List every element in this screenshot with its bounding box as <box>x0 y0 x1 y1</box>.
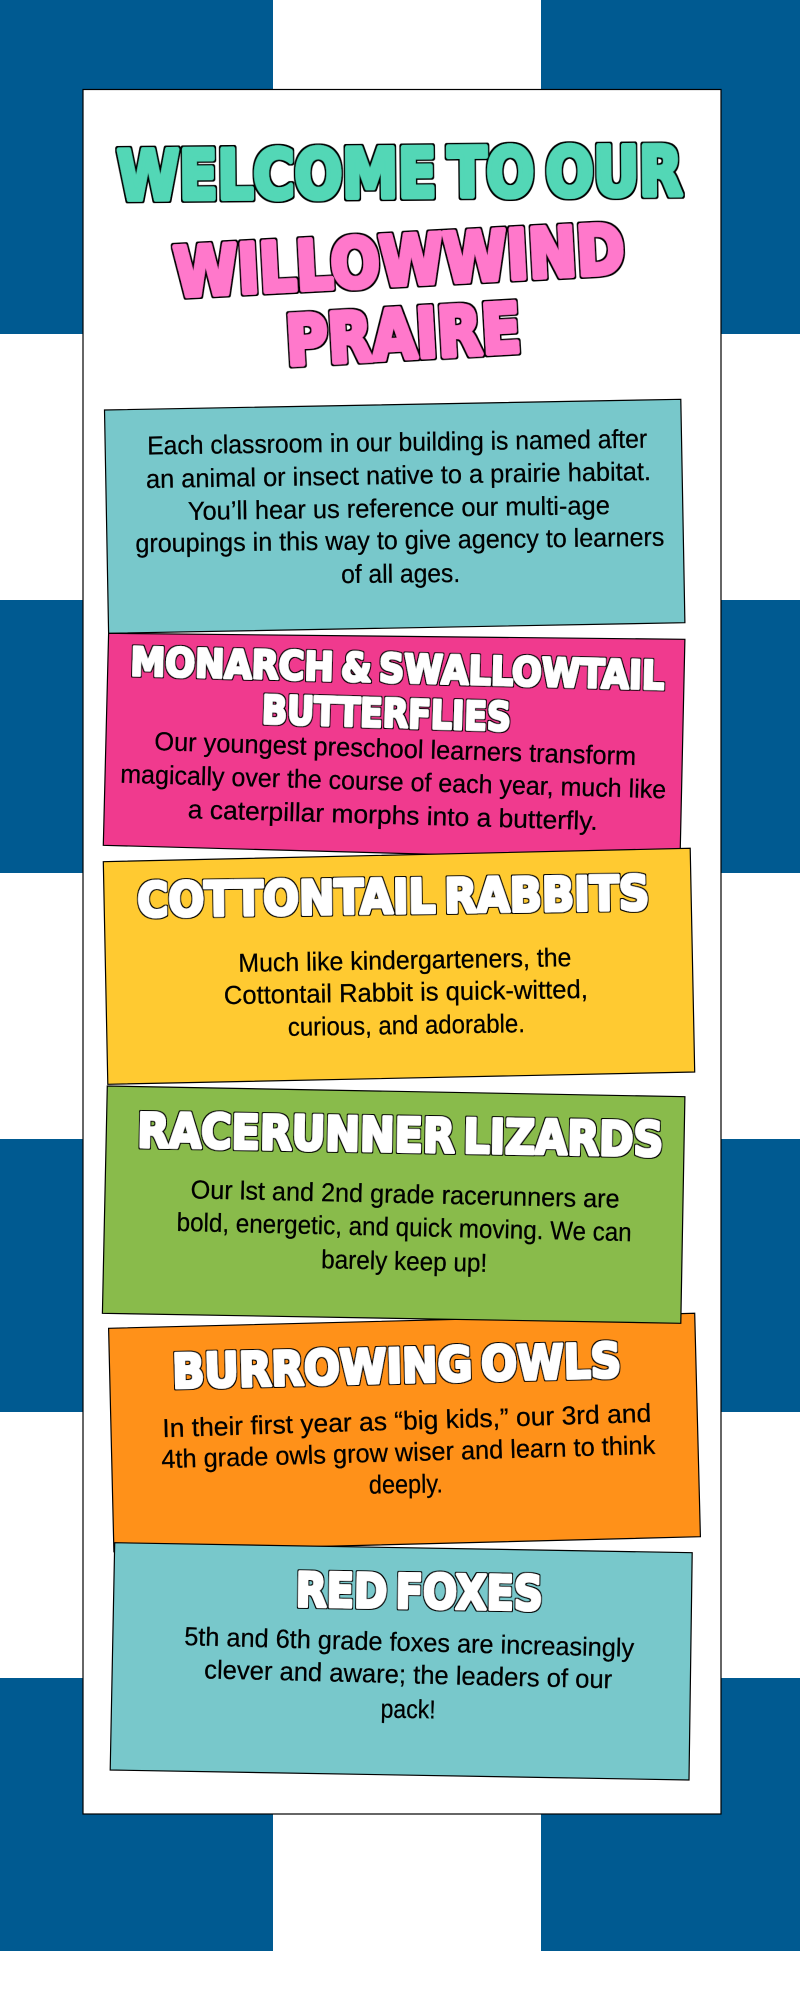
text block: introduction: Each classroom in our building is named after <box>147 424 648 460</box>
heading: monarch and swallowtail butterflies: MONARCH & SWALLOWTAIL <box>130 640 665 699</box>
text block: butterflies description: magically over the course of each year, much like <box>120 759 667 804</box>
text block: owls description: deeply. <box>369 1468 443 1500</box>
panel background: orange <box>109 1313 700 1552</box>
text block: foxes description: clever and aware; the leaders of our <box>204 1654 613 1694</box>
title line: welcome to our: WELCOME TO OUR <box>117 133 683 216</box>
title line: prairie: PRAIRE <box>284 290 523 382</box>
panel background: pink <box>103 633 685 861</box>
text block: lizards description: bold, energetic, and quick moving. We can <box>176 1207 632 1247</box>
text block: introduction: an animal or insect native to a prairie habitat. <box>146 456 651 494</box>
panel background: teal <box>110 1543 692 1780</box>
text block: foxes description: pack! <box>380 1694 436 1724</box>
text block: lizards description <box>176 1174 632 1278</box>
text block: rabbits description: Much like kindergarteners, the <box>238 942 572 978</box>
text block: foxes description: 5th and 6th grade foxes are increasingly <box>184 1621 635 1663</box>
white content panel <box>83 90 721 1814</box>
panel: burrowing owls <box>109 1313 700 1552</box>
panel: monarch and swallowtail butterflies <box>103 633 685 861</box>
text block: rabbits description: curious, and adorable. <box>288 1008 525 1042</box>
panel background: teal <box>104 399 685 633</box>
text block: butterflies description: Our youngest preschool learners transform <box>154 726 637 771</box>
text block: rabbits description <box>224 942 588 1042</box>
text block: lizards description: Our lst and 2nd grade racerunners are <box>190 1174 620 1214</box>
text block: owls description <box>161 1398 657 1500</box>
title line: willowwind: WILLOWWIND <box>172 211 627 313</box>
text block: introduction: of all ages. <box>341 558 460 589</box>
heading: monarch and swallowtail butterflies <box>130 640 665 741</box>
panel: racerunner lizards <box>102 1086 685 1323</box>
text block: lizards description: barely keep up! <box>321 1244 488 1278</box>
heading: burrowing owls: BURROWING OWLS <box>172 1334 622 1400</box>
heading: cottontail rabbits: COTTONTAIL RABBITS <box>137 867 650 929</box>
heading: racerunner lizards: RACERUNNER LIZARDS <box>137 1104 664 1168</box>
panel: red foxes <box>110 1543 692 1780</box>
text block: introduction <box>135 424 665 589</box>
panel background: green <box>102 1086 685 1323</box>
text block: butterflies description: a caterpillar morphs into a butterfly. <box>188 794 598 836</box>
panel background: yellow <box>103 848 695 1084</box>
text block: introduction: You’ll hear us reference our multi-age <box>188 490 610 526</box>
text block: butterflies description <box>120 726 667 836</box>
text block: rabbits description: Cottontail Rabbit is quick-witted, <box>224 974 588 1010</box>
text block: introduction: groupings in this way to give agency to learners <box>135 522 665 558</box>
heading: monarch and swallowtail butterflies: BUTTERFLIES <box>261 688 511 741</box>
panel: introduction <box>104 399 685 633</box>
panel: cottontail rabbits <box>103 848 695 1084</box>
text block: owls description: 4th grade owls grow wiser and learn to think <box>161 1430 657 1474</box>
text block: foxes description <box>184 1621 635 1724</box>
title <box>117 133 683 382</box>
text block: owls description: In their first year as “big kids,” our 3rd and <box>162 1398 652 1443</box>
heading: red foxes: RED FOXES <box>295 1563 543 1622</box>
